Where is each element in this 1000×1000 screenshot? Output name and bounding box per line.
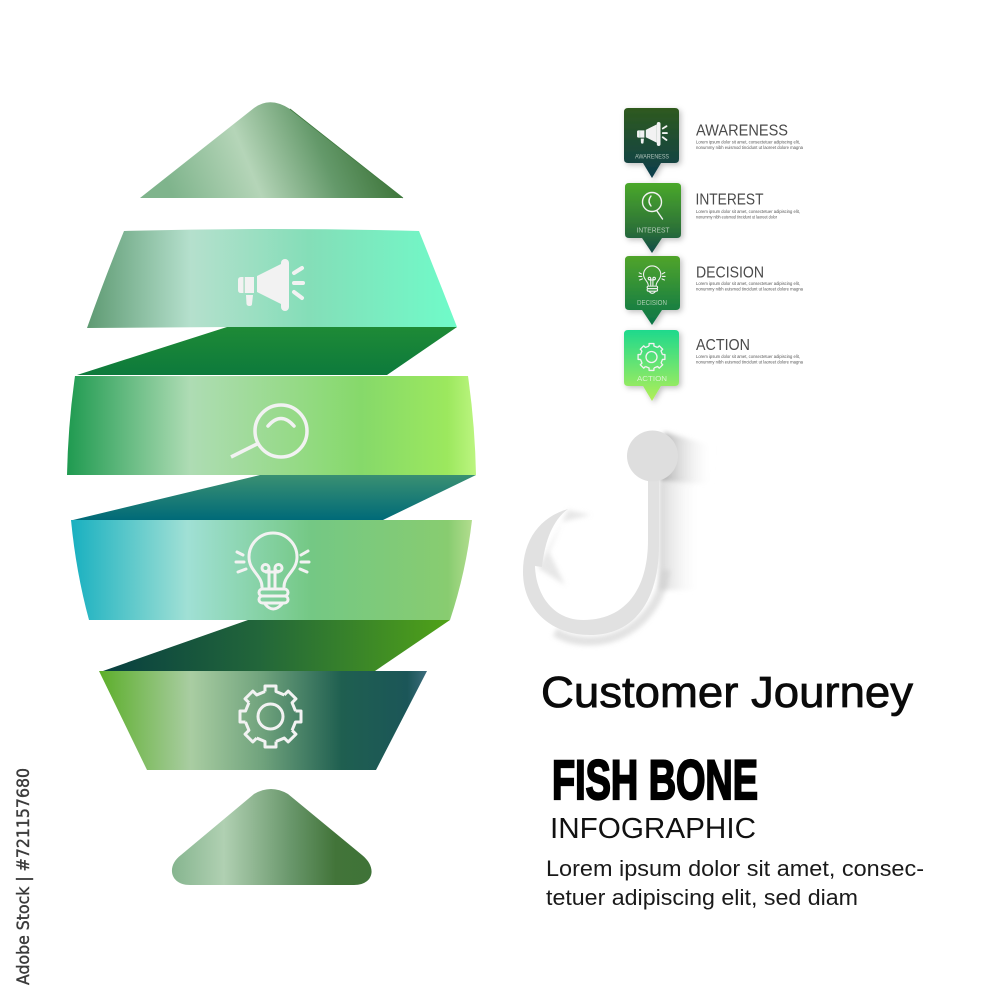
icon: light bulb [236,533,309,609]
pin: awareness: AWARENESS [635,154,670,160]
step: interest [625,183,800,253]
band 1: awareness [87,229,457,328]
band 3: decision [71,520,472,620]
stock credit: Adobe Stock | #721157680 [14,768,34,985]
fold between bands 1 and 2 [77,327,457,375]
text: awareness description: Lorem ipsum dolor sit amet, consectetuer adipiscing elit, [696,140,800,144]
step: decision [625,256,804,325]
fold between bands 2 and 3 [73,475,476,520]
fish head triangle [140,102,403,198]
heading: fish bone: FISH BONE [552,748,758,811]
fish body illustration [67,102,476,885]
pin: awareness [624,108,679,178]
pin: action [624,330,679,401]
pin: decision [625,256,680,325]
text: awareness description [696,140,804,150]
heading: awareness: AWARENESS [696,122,788,140]
text block: description: Lorem ipsum dolor sit amet, consec- [546,856,924,881]
text: interest description: nonummy nibh euismod tincidunt ut laoreet dolor [696,214,777,220]
subheading: infographic: INFOGRAPHIC [550,813,756,845]
heading: action: ACTION [696,337,750,354]
pin: interest [625,183,681,253]
step list [624,108,804,401]
step: action [624,330,804,401]
band 2: interest [67,376,476,475]
text: interest description [696,209,800,220]
heading: decision: DECISION [696,264,764,282]
pin: interest: INTEREST [636,226,670,234]
text block: description [546,856,924,910]
text: decision description [696,281,804,292]
text: decision description: nonummy nibh euismod tincidunt ut laoreet dolore magna [696,286,804,292]
text block: description: tetuer adipiscing elit, sed diam [546,885,858,910]
fold between bands 3 and 4 [103,620,450,671]
text: interest description: Lorem ipsum dolor sit amet, consectetuer adipiscing elit, [696,209,800,214]
pin: decision: DECISION [637,298,667,307]
text: decision description: Lorem ipsum dolor sit amet, consectetuer adipiscing elit, [696,281,800,286]
title: customer journey: Customer Journey [541,668,913,717]
text: action description [696,354,804,364]
text: action description: nonummy nibh euismod tincidunt ut laoreet dolore magna [696,360,804,364]
fish tail triangle [172,789,372,885]
icon: megaphone [238,259,303,311]
step: awareness [624,108,804,178]
pin: action: ACTION [637,374,667,383]
band 4: action [99,671,427,770]
heading: interest: INTEREST [696,192,764,208]
icon: magnifying glass [231,405,307,457]
icon: gear [239,685,302,748]
icon: fish hook [523,430,714,641]
text: action description: Lorem ipsum dolor sit amet, consectetuer adipiscing elit, [696,354,800,359]
text: awareness description: nonummy nibh euismod tincidunt ut laoreet dolore magna [696,145,804,150]
